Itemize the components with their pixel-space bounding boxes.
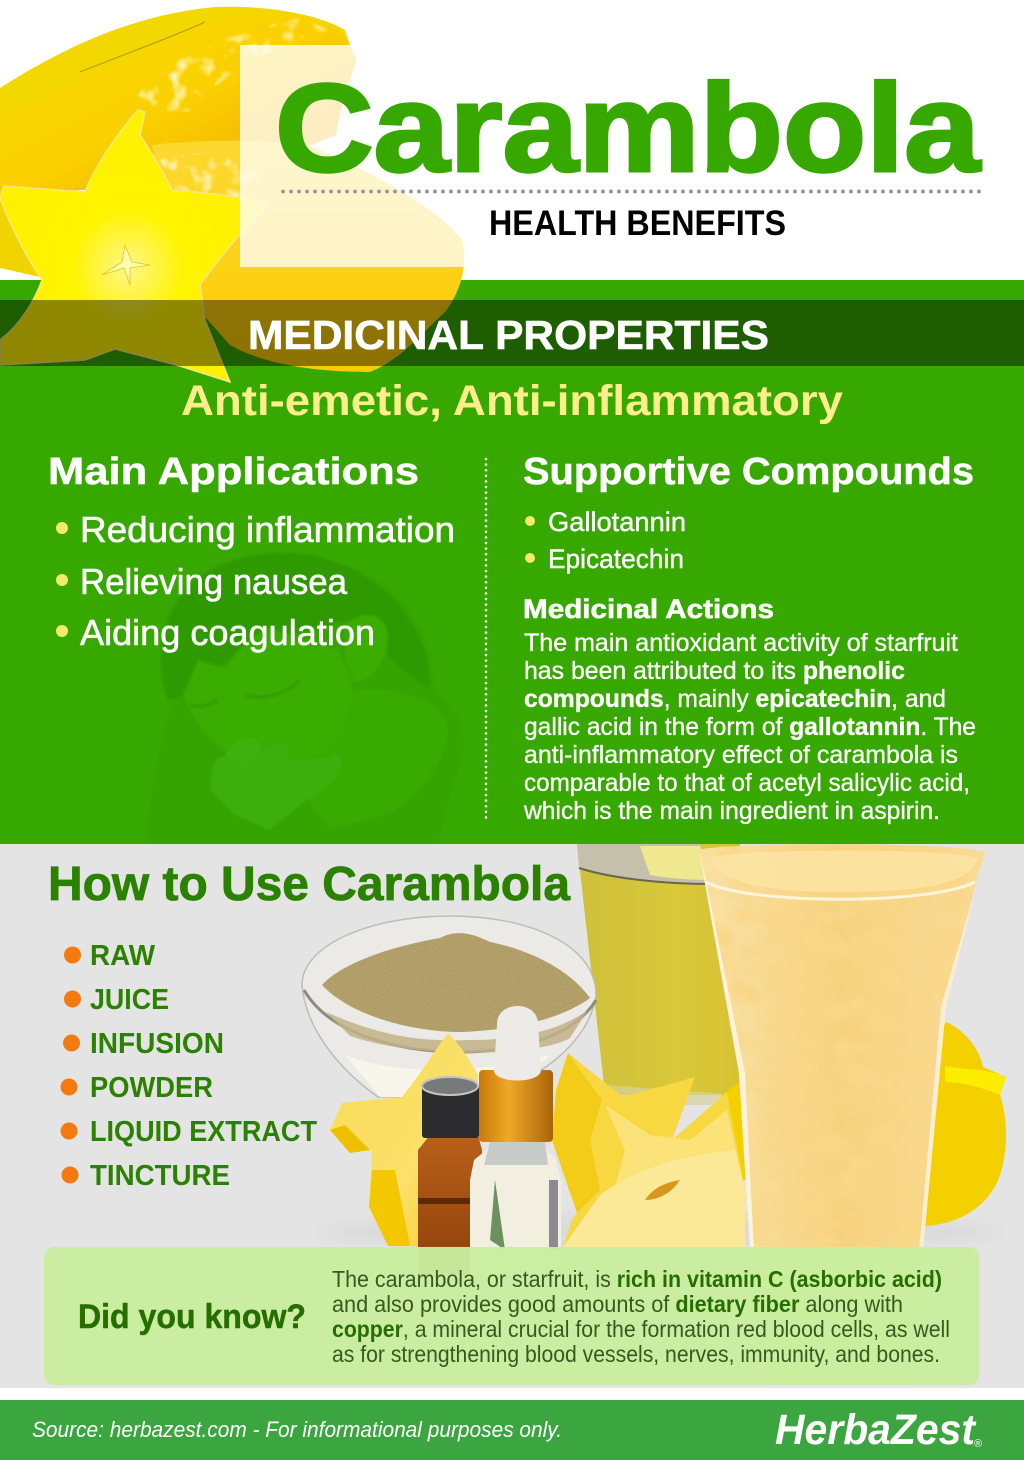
text block: medicinal actions description: compounds, mainly epicatechin, and	[524, 685, 946, 713]
heading band: medicinal properties	[0, 300, 1024, 366]
fruit left edge	[0, 195, 45, 277]
heading band: medicinal properties: MEDICINAL PROPERTIES	[248, 312, 769, 358]
callout text: copper, a mineral crucial for the formation red blood cells, as well	[332, 1316, 950, 1342]
usage: infusion: INFUSION	[90, 1028, 224, 1060]
back juice glass	[577, 844, 740, 1105]
callout: did you know	[44, 1247, 979, 1385]
heading: supportive compounds: Supportive Compounds	[523, 451, 974, 493]
text block: medicinal actions description: gallic acid in the form of gallotannin. The	[524, 713, 976, 741]
powder bowl	[302, 916, 596, 1097]
callout text: The carambola, or starfruit, is rich in vitamin C (asborbic acid)	[332, 1266, 942, 1292]
callout text	[332, 1266, 950, 1367]
amber bottle	[418, 1077, 482, 1275]
text block: medicinal actions description: has been attributed to its phenolic	[524, 657, 905, 685]
right whole star fruit	[721, 1022, 1006, 1226]
panel: how to use background	[0, 844, 1024, 1388]
callout heading: Did you know?	[78, 1298, 306, 1336]
fruit front star slice	[0, 110, 266, 382]
panel: medicinal properties background	[0, 280, 1024, 844]
text block: medicinal actions description: anti-inflammatory effect of carambola is	[524, 741, 958, 769]
shadow under fruit	[320, 1214, 1000, 1250]
panel: main applications	[48, 451, 455, 653]
fruit main body	[0, 14, 356, 190]
text block: medicinal actions description: The main antioxidant activity of starfruit	[524, 629, 958, 657]
right star fruit cluster	[552, 1053, 745, 1247]
heading: how to use carambola: How to Use Carambola	[48, 858, 570, 911]
fruit star centre	[102, 245, 150, 285]
text block: medicinal actions description: which is the main ingredient in aspirin.	[523, 797, 940, 825]
application: aiding coagulation: Aiding coagulation	[80, 612, 375, 653]
compound: epicatechin: Epicatechin	[548, 544, 684, 574]
subtitle: HEALTH BENEFITS	[489, 204, 786, 243]
logo: HerbaZest: HerbaZest	[775, 1406, 977, 1454]
translucent title backing	[240, 45, 465, 267]
compound: gallotannin: Gallotannin	[548, 507, 686, 537]
usage: liquid extract: LIQUID EXTRACT	[90, 1116, 317, 1148]
source note: Source: herbazest.com - For informational purposes only.	[32, 1417, 562, 1442]
heading: main applications: Main Applications	[48, 451, 419, 493]
subheading: properties list: Anti-emetic, Anti-inflammatory	[181, 377, 843, 425]
heading: medicinal actions: Medicinal Actions	[523, 594, 774, 624]
usage: raw: RAW	[90, 940, 156, 972]
image: carambola fruit	[0, 7, 464, 382]
callout text: as for strengthening blood vessels, nerves, immunity, and bones.	[332, 1341, 940, 1367]
image: nausea woman silhouette	[146, 553, 462, 844]
application: relieving nausea: Relieving nausea	[80, 561, 348, 602]
fruit lower lobe	[152, 141, 464, 372]
footer	[0, 1400, 1024, 1460]
usage: juice: JUICE	[90, 984, 169, 1016]
callout text: and also provides good amounts of dietary fiber along with	[332, 1291, 903, 1317]
panel: supportive compounds	[523, 451, 976, 825]
fruit back ridge	[0, 7, 357, 200]
fruit ridge line	[80, 22, 205, 72]
left star fruit	[330, 1033, 478, 1247]
text block: medicinal actions description: comparable to that of acetyl salicylic acid,	[524, 769, 970, 797]
usage: tincture: TINCTURE	[90, 1160, 230, 1192]
fruit lobe highlight	[160, 152, 260, 205]
title block	[275, 59, 982, 243]
application: reducing inflammation: Reducing inflammation	[80, 509, 455, 550]
dotted rule	[283, 190, 982, 194]
fruit highlight	[130, 18, 330, 112]
list: usage forms	[60, 940, 317, 1192]
registered mark: ®	[974, 1438, 982, 1450]
smoothie glass	[699, 844, 985, 1385]
text block: medicinal actions description	[523, 629, 976, 825]
usage: powder: POWDER	[90, 1072, 213, 1104]
heading: Carambola: Carambola	[275, 59, 982, 198]
dropper bottle	[470, 1006, 561, 1275]
image: juice, powder, bottles and star fruit	[302, 844, 1006, 1385]
